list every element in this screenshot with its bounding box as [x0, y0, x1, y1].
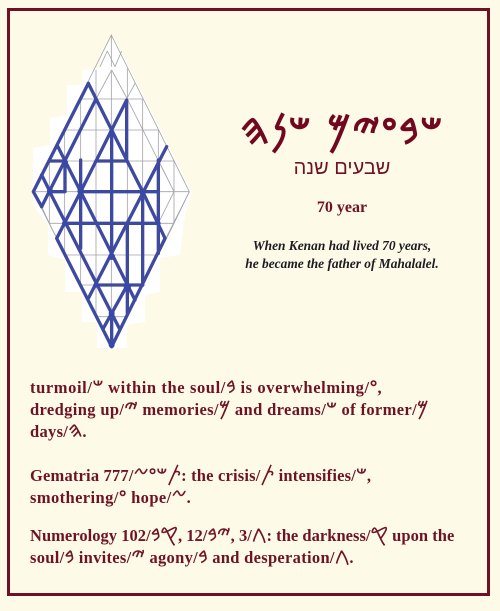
paragraph: turmoil: dredging up/𐤉 memories/𐤌 and dreams/𐤔 of former/𐤌 — [30, 396, 429, 420]
verse — [245, 238, 439, 271]
verse: he became the father of Mahalalel. — [245, 256, 439, 271]
heading: 70 year: 70 year — [317, 199, 367, 216]
paragraph: turmoil: turmoil/𐤔 within the soul/𐤁 is overwhelming/𐤏, — [30, 374, 382, 398]
title: paleo-Hebrew: 𐤄𐤍𐤔 𐤌𐤉𐤏𐤁𐤔 — [240, 105, 444, 155]
paragraph: gematria — [30, 462, 371, 508]
blue figure — [33, 83, 167, 347]
verse: When Kenan had lived 70 years, — [253, 238, 431, 253]
paragraph: numerology: Numerology 102/𐤁𐤒, 12/𐤁𐤉, 3/𐤂: the darkness/𐤒 upon the — [30, 522, 454, 546]
paragraph: numerology: soul/𐤁 invites/𐤉 agony/𐤁 and desperation/𐤂. — [30, 544, 354, 568]
paragraph: gematria: Gematria 777/𐤆𐤏𐤔𐤕: the crisis/𐤕 intensifies/𐤔, — [30, 462, 371, 486]
paragraph: numerology — [30, 522, 454, 568]
paragraph: turmoil — [30, 374, 429, 442]
subtitle: Hebrew: שבעים שנה — [294, 157, 390, 179]
node dots — [47, 130, 161, 348]
paragraph: turmoil: days/𐤄. — [30, 418, 87, 442]
paragraph: gematria: smothering/𐤏 hope/𐤆. — [30, 484, 191, 508]
white halo behind diamond — [33, 37, 192, 348]
grey grid — [33, 35, 189, 347]
